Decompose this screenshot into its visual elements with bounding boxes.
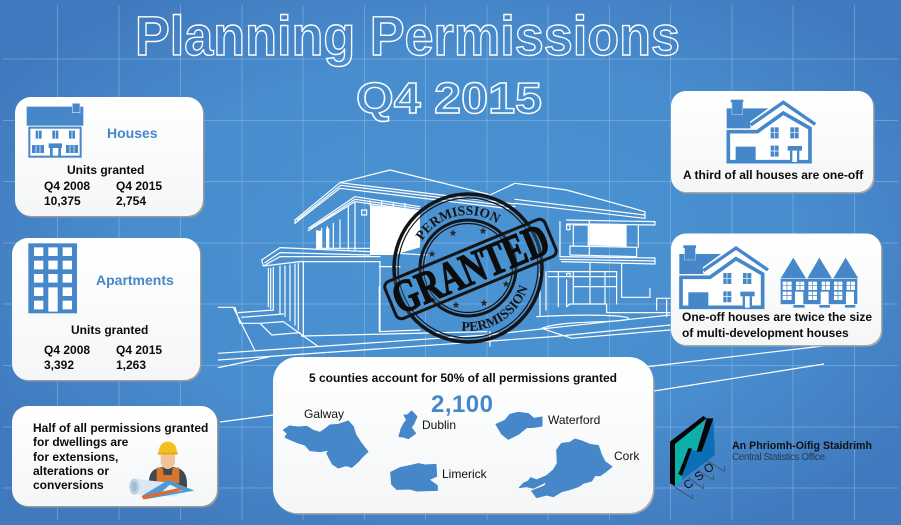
big number: 2,100 [431, 391, 493, 418]
caption: One-off houses are twice the size [682, 310, 872, 324]
logo mark: C [681, 476, 696, 492]
units granted text: 10,375 [44, 194, 81, 208]
map: Dublin [399, 411, 417, 439]
panel: house size [671, 234, 882, 346]
icon: one-off house [727, 100, 815, 163]
county labels: Dublin [422, 418, 456, 432]
units granted text: 2,754 [116, 194, 146, 208]
icon: terraced houses [778, 258, 860, 308]
panel: one-off share [671, 91, 874, 194]
units granted text: Units granted [67, 163, 144, 177]
map: Cork [519, 439, 612, 498]
granted banner: GRANTED [384, 213, 556, 324]
map: Waterford [496, 412, 542, 439]
title [135, 4, 680, 123]
stamp text top: PERMISSION [415, 206, 502, 241]
panel: apartments [12, 238, 202, 382]
panel: counties [273, 357, 654, 514]
note text: for dwellings are [33, 435, 129, 449]
logo mark [670, 416, 724, 499]
maps of counties [283, 411, 612, 498]
house wireframe illustration [218, 170, 670, 368]
units granted text: Q4 2015 [116, 343, 162, 357]
note text: for extensions, [33, 450, 118, 464]
county labels: Galway [304, 407, 344, 421]
title: Planning Permissions [135, 4, 680, 67]
subtitle: Q4 2015 [356, 74, 542, 123]
logo: CSO: Central Statistics Office [732, 452, 825, 463]
icon: house [27, 103, 83, 157]
note text [33, 421, 208, 492]
heading: counties: 5 counties account for 50% of all permissions granted [309, 371, 617, 385]
logo: CSO [670, 416, 872, 499]
ground sketch lines [220, 346, 824, 422]
map: Limerick [391, 464, 437, 491]
units granted text: Q4 2015 [116, 179, 162, 193]
stamp text bottom: PERMISSION [462, 284, 528, 332]
note text: Half of all permissions granted [33, 421, 208, 435]
icon: construction worker [129, 442, 194, 499]
county labels: Limerick [442, 467, 488, 481]
icon: apartment block [28, 243, 77, 313]
panel: houses [15, 97, 204, 218]
units granted text: Units granted [71, 323, 148, 337]
stamp: permission granted [383, 192, 558, 344]
units granted text: Q4 2008 [44, 179, 90, 193]
map: Galway [283, 421, 368, 468]
county labels: Cork [614, 449, 640, 463]
logo mark: S [692, 468, 706, 484]
county labels: Waterford [548, 413, 600, 427]
note text: conversions [33, 478, 104, 492]
caption: A third of all houses are one-off [683, 168, 864, 182]
heading: apartments: Apartments [96, 272, 174, 288]
note text: alterations or [33, 464, 109, 478]
logo text: An Phriomh-Oifig Staidrimh [732, 440, 872, 452]
units granted text: 1,263 [116, 358, 146, 372]
logo mark: O [701, 460, 717, 476]
caption: of multi-development houses [682, 326, 849, 340]
units granted text [44, 163, 162, 208]
units granted text: Q4 2008 [44, 343, 90, 357]
county labels [304, 407, 640, 481]
units granted text: 3,392 [44, 358, 74, 372]
caption [682, 310, 872, 340]
units granted text [44, 323, 162, 372]
panel: extensions note [12, 406, 218, 508]
heading: houses: Houses [107, 125, 158, 141]
granted banner [381, 212, 560, 325]
icon: one-off house [679, 245, 768, 308]
